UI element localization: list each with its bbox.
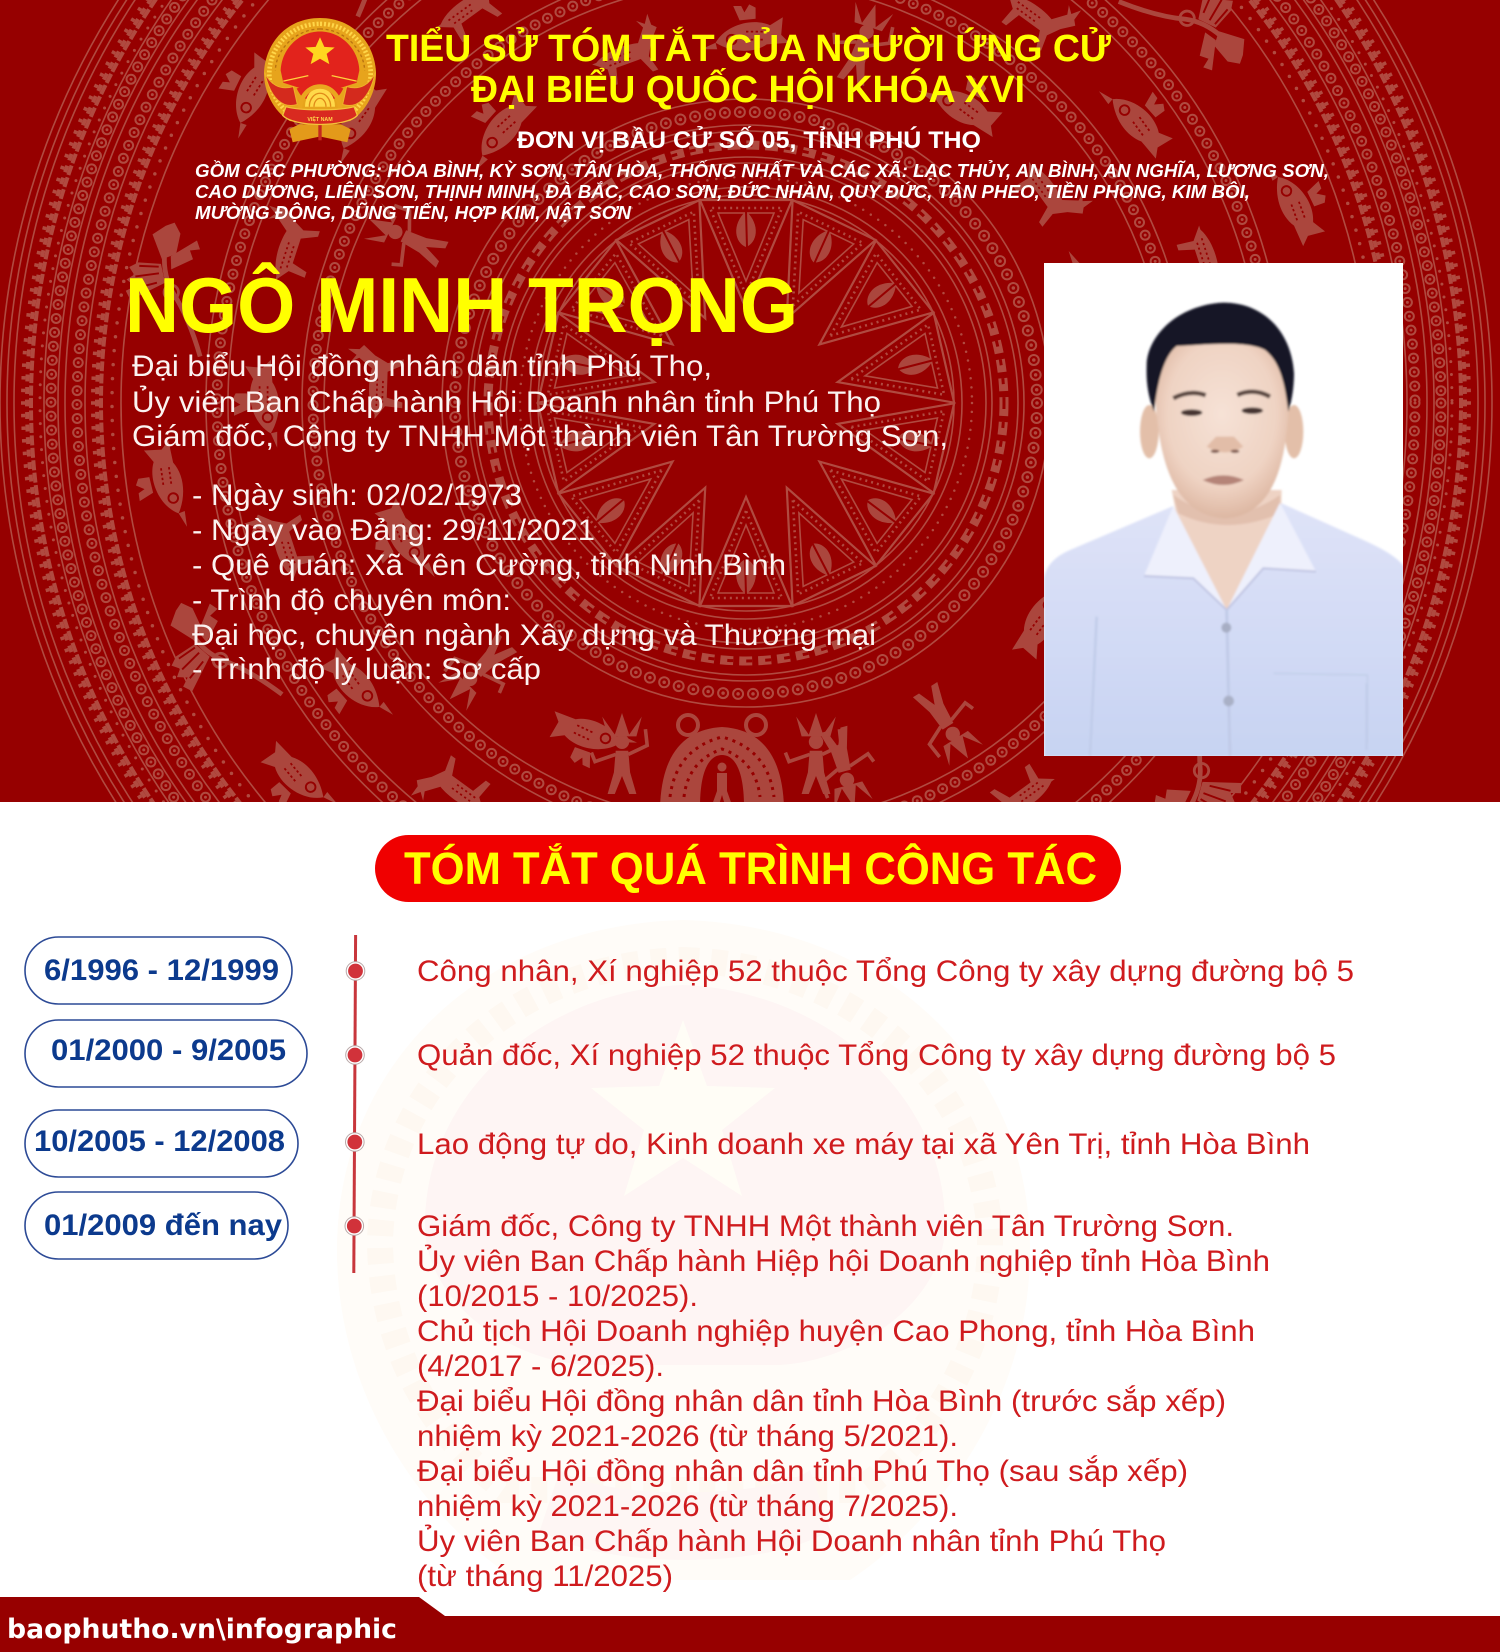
timeline <box>345 935 365 1273</box>
job 4: Giám đốc, Công ty TNHH Một thành viên Tân Trường Sơn. <box>417 1210 1234 1243</box>
job 4: Đại biểu Hội đồng nhân dân tỉnh Phú Thọ (sau sắp xếp) <box>417 1455 1188 1488</box>
job 4: nhiệm kỳ 2021-2026 (từ tháng 5/2021). <box>417 1420 958 1453</box>
portrait photo <box>1044 263 1404 757</box>
date pill 1 <box>25 937 292 1004</box>
date pill 2: 01/2000 - 9/2005 <box>51 1034 286 1067</box>
job 4: Ủy viên Ban Chấp hành Hiệp hội Doanh nghiệp tỉnh Hòa Bình <box>417 1244 1270 1278</box>
text block: wards and communes <box>195 160 1329 223</box>
job 4: (từ tháng 11/2025) <box>417 1560 673 1593</box>
text block: candidate positions: Ủy viên Ban Chấp hành Hội Doanh nhân tỉnh Phú Thọ <box>132 385 881 419</box>
text block: personal details: - Ngày sinh: 02/02/1973 <box>192 479 522 512</box>
date pill 3 <box>25 1110 298 1177</box>
date pill 4 <box>25 1192 288 1259</box>
footer band: baophutho.vn\infographic <box>7 1614 397 1645</box>
job 3: Lao động tự do, Kinh doanh xe máy tại xã Yên Trị, tỉnh Hòa Bình <box>417 1128 1310 1161</box>
background: bronze drum pattern <box>0 0 1493 802</box>
icon: national emblem: VIỆT NAM <box>307 115 333 123</box>
job 4: Ủy viên Ban Chấp hành Hội Doanh nhân tỉnh Phú Thọ <box>417 1524 1166 1558</box>
footer band <box>0 1597 1500 1652</box>
date pill 1: 6/1996 - 12/1999 <box>44 954 279 987</box>
date pill 4: 01/2009 đến nay <box>44 1209 282 1242</box>
job 4: Đại biểu Hội đồng nhân dân tỉnh Hòa Bình (trước sắp xếp) <box>417 1385 1226 1418</box>
job 4: (4/2017 - 6/2025). <box>417 1350 664 1383</box>
date pill 2 <box>25 1020 307 1087</box>
heading: candidate name: NGÔ MINH TRỌNG <box>125 261 798 349</box>
text block: personal details: - Quê quán: Xã Yên Cường, tỉnh Ninh Bình <box>192 549 786 582</box>
text block: personal details: Đại học, chuyên ngành Xây dựng và Thương mại <box>192 619 876 652</box>
title <box>386 25 1111 111</box>
heading pill: work history: TÓM TẮT QUÁ TRÌNH CÔNG TÁC <box>404 843 1097 894</box>
text block: candidate positions: Giám đốc, Công ty TNHH Một thành viên Tân Trường Sơn, <box>132 420 948 453</box>
text block: wards and communes: GỒM CÁC PHƯỜNG: HÒA BÌNH, KỲ SƠN, TÂN HÒA, THỐNG NHẤT VÀ CÁC XÃ: LẠC THỦY, AN BÌNH, AN NGHĨA, LƯƠNG SƠN, <box>195 160 1329 181</box>
text block: candidate positions: Đại biểu Hội đồng nhân dân tỉnh Phú Thọ, <box>132 350 712 383</box>
date pill 3: 10/2005 - 12/2008 <box>34 1125 285 1158</box>
text block: wards and communes: MƯỜNG ĐỘNG, DŨNG TIẾN, HỢP KIM, NẬT SƠN <box>195 202 632 223</box>
panel: red header background <box>0 0 1500 802</box>
job 4: (10/2015 - 10/2025). <box>417 1280 698 1313</box>
text block: candidate positions <box>132 350 948 453</box>
text block: personal details: - Ngày vào Đảng: 29/11/2021 <box>192 514 595 547</box>
text block: personal details: - Trình độ chuyên môn: <box>192 584 511 617</box>
text block: wards and communes: CAO DƯƠNG, LIÊN SƠN, THỊNH MINH, ĐÀ BẮC, CAO SƠN, ĐỨC NHÀN, QUY ĐỨC, TÂN PHEO, TIỀN PHONG, KIM BÔI, <box>195 181 1250 202</box>
watermark: faint emblem <box>337 920 1030 1580</box>
job 1: Công nhân, Xí nghiệp 52 thuộc Tổng Công ty xây dựng đường bộ 5 <box>417 955 1354 988</box>
text block: personal details: - Trình độ lý luận: Sơ cấp <box>192 653 541 686</box>
job 4: Chủ tịch Hội Doanh nghiệp huyện Cao Phong, tỉnh Hòa Bình <box>417 1315 1255 1348</box>
icon: national emblem <box>264 18 376 142</box>
job 4 <box>417 1210 1270 1593</box>
subtitle: constituency: ĐƠN VỊ BẦU CỬ SỐ 05, TỈNH PHÚ THỌ <box>517 125 981 154</box>
text block: personal details <box>192 479 876 686</box>
job 2: Quản đốc, Xí nghiệp 52 thuộc Tổng Công ty xây dựng đường bộ 5 <box>417 1039 1336 1072</box>
job 4: nhiệm kỳ 2021-2026 (từ tháng 7/2025). <box>417 1490 958 1523</box>
title: TIỂU SỬ TÓM TẮT CỦA NGƯỜI ỨNG CỬ <box>386 25 1111 70</box>
title: ĐẠI BIỂU QUỐC HỘI KHÓA XVI <box>471 66 1025 111</box>
